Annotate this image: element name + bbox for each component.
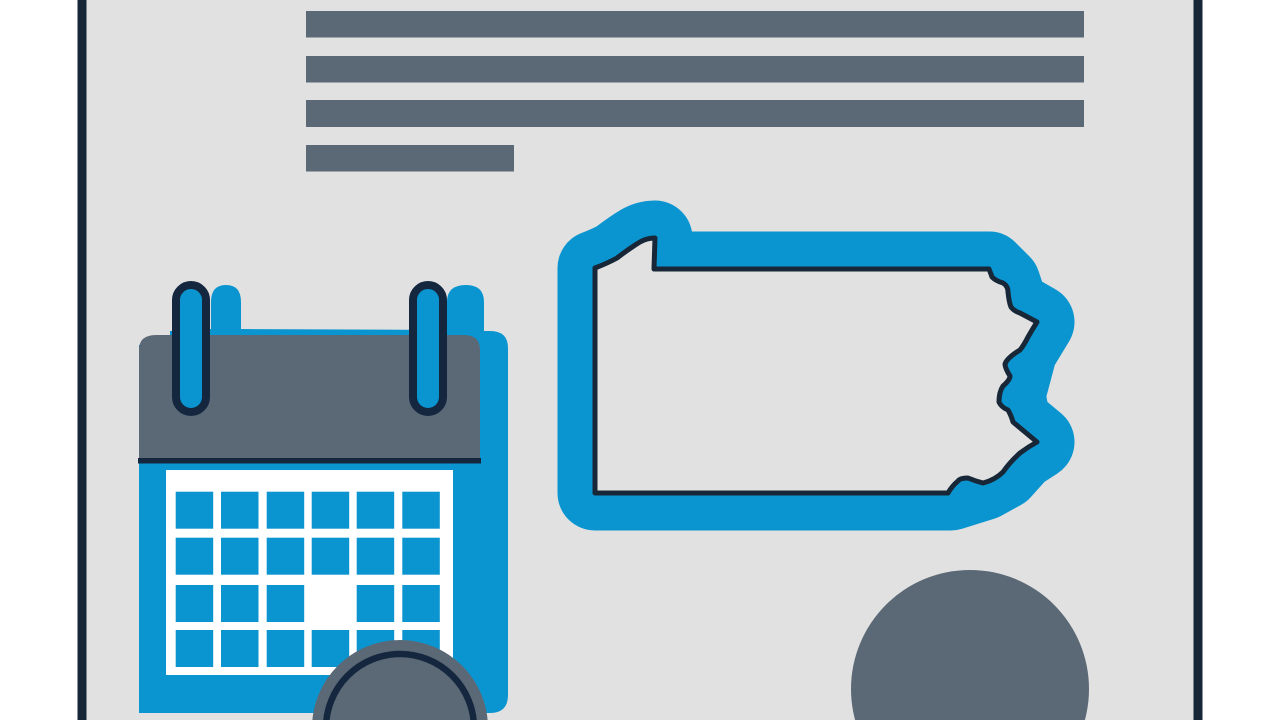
calendar date cells — [176, 492, 440, 667]
calendar grey header — [139, 335, 480, 460]
calendar binding ring left — [176, 285, 206, 412]
icon: calendar — [138, 285, 508, 713]
icon: Pennsylvania state outline — [595, 238, 1037, 493]
text block: placeholder lines — [306, 11, 1084, 172]
icon: small seal circle — [312, 640, 488, 720]
calendar white date area — [166, 470, 453, 675]
calendar blue backing — [139, 285, 508, 713]
icon: large grey circle — [851, 570, 1089, 720]
calendar header rule — [138, 458, 481, 464]
calendar binding ring right — [413, 285, 443, 412]
